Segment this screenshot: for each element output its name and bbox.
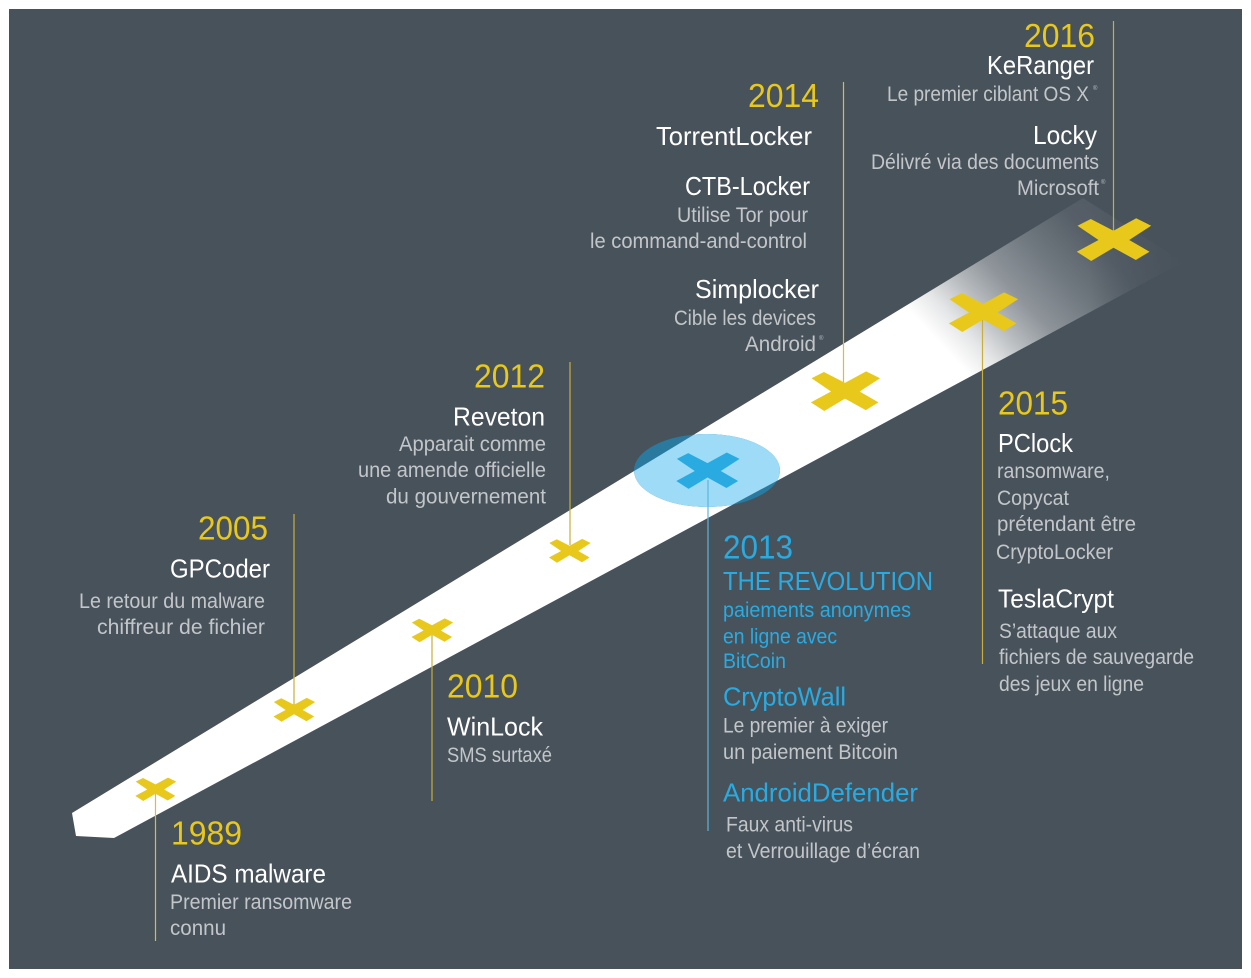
text block: 2013: BitCoin (723, 650, 786, 673)
text block: 2015: PClock (998, 428, 1074, 458)
text block: 2013: paiements anonymes (723, 599, 911, 622)
text block: 2013: 2013 (723, 528, 793, 566)
text block: 2014: Android (745, 333, 816, 356)
text block: 2012: une amende officielle (358, 459, 546, 482)
text block: 2014: 2014 (748, 77, 819, 114)
text block: 2016: Locky (1033, 120, 1097, 150)
text block: 2014: Cible les devices (674, 307, 816, 330)
text block: 2012: 2012 (474, 358, 545, 394)
text block: 2015: prétendant être (997, 513, 1136, 536)
text block: 2016: Le premier ciblant OS X (887, 83, 1089, 106)
text block: 2005: 2005 (198, 510, 268, 546)
text block: 2014: TorrentLocker (656, 121, 812, 151)
text block: 2016: ® (1093, 85, 1098, 92)
highlight ellipse for 2013 (634, 434, 780, 507)
text block: 2014: Simplocker (695, 274, 819, 304)
timeline markers (135, 218, 1151, 801)
timeline strip (72, 192, 1183, 838)
text block: 1989 (170, 814, 352, 940)
text block: 2016: Microsoft (1017, 177, 1099, 200)
text block: 2015: Copycat (997, 487, 1069, 510)
text block: 1989: Premier ransomware (170, 891, 352, 914)
text block: 2012: Apparait comme (399, 433, 546, 456)
text block: 2016: Délivré via des documents (871, 151, 1099, 174)
text block: 2014 (590, 77, 824, 356)
text block: 2010: WinLock (447, 712, 544, 742)
text block: 1989: AIDS malware (171, 858, 326, 888)
text block: 2016: 2016 (1024, 17, 1095, 54)
text block: 2015: ransomware, (997, 460, 1110, 483)
text block: 2013: AndroidDefender (723, 778, 918, 808)
text block: 2005: GPCoder (170, 554, 270, 584)
text block: 2015 (996, 384, 1194, 696)
text block: 2013: en ligne avec (723, 626, 837, 648)
text block: 2015: 2015 (998, 384, 1068, 422)
text block: 2015: CryptoLocker (996, 541, 1113, 564)
text block: 2016 (871, 17, 1106, 200)
text block: 2014: CTB-Locker (685, 171, 810, 201)
text block: 2010: 2010 (447, 668, 518, 704)
text block: 2014: ® (819, 335, 824, 342)
text block: 2016: ® (1101, 179, 1106, 186)
text block: 2012 (358, 358, 546, 508)
text block: 2012: Reveton (453, 402, 545, 432)
text block: 2015: S’attaque aux (999, 620, 1117, 643)
text block: 2005: chiffreur de fichier (97, 616, 265, 639)
text block: 1989: connu (170, 917, 226, 940)
marker 2012 (549, 539, 591, 563)
text block: 2013: et Verrouillage d’écran (726, 840, 920, 863)
text block: 2012: du gouvernement (386, 486, 546, 508)
text block: 2010: SMS surtaxé (447, 744, 552, 767)
text block: 2016: KeRanger (987, 50, 1094, 80)
text block: 2014: le command-and-control (590, 230, 807, 253)
text block: 2013: un paiement Bitcoin (723, 741, 898, 764)
text block: 2013: Faux anti-virus (726, 814, 853, 836)
text block: 2013: THE REVOLUTION (723, 566, 933, 596)
text block: 2013 (723, 528, 933, 863)
marker 2005 (273, 698, 315, 722)
connector lines (156, 21, 1114, 941)
text block: 2015: TeslaCrypt (998, 584, 1115, 614)
text block: 2014: Utilise Tor pour (677, 204, 808, 227)
text block: 2005: Le retour du malware (79, 590, 265, 613)
text block: 2013: Le premier à exiger (723, 714, 888, 738)
marker 2016 (1077, 218, 1151, 261)
text block: 2015: fichiers de sauvegarde (999, 646, 1194, 669)
marker 2014 (811, 371, 880, 411)
text block: 2015: des jeux en ligne (999, 673, 1144, 696)
text block: 2005 (79, 510, 270, 639)
marker 2013 (676, 453, 740, 489)
text block: 2013: CryptoWall (723, 682, 846, 712)
marker 2015 (949, 292, 1018, 332)
marker 1989 (135, 778, 176, 801)
marker 2010 (411, 618, 453, 642)
text block: 1989: 1989 (171, 814, 242, 852)
text block: 2010 (447, 668, 552, 767)
